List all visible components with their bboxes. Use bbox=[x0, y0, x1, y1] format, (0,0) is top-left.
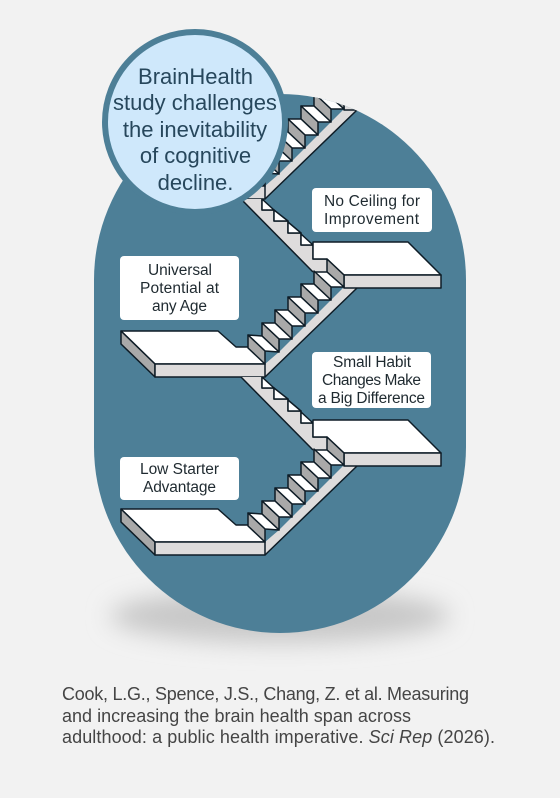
headline text: the inevitability bbox=[123, 117, 267, 142]
citation text bbox=[62, 684, 495, 747]
callout: Universal Potential at any Age: any Age bbox=[152, 298, 207, 315]
callout: Universal Potential at any Age bbox=[120, 256, 239, 320]
middle staircase flight bbox=[121, 199, 441, 377]
top staircase flight bbox=[247, 97, 358, 200]
callout: No Ceiling for Improvement bbox=[312, 188, 432, 232]
headline text: of cognitive bbox=[140, 143, 251, 168]
headline text: BrainHealth bbox=[138, 64, 253, 89]
headline text: decline. bbox=[158, 170, 233, 195]
callout: Small Habit Changes Make a Big Difference: a Big Difference bbox=[318, 390, 425, 407]
callout: Small Habit Changes Make a Big Difference: Changes Make bbox=[322, 372, 421, 389]
callout: Small Habit Changes Make a Big Difference: Small Habit bbox=[333, 354, 412, 371]
ground shadow bbox=[110, 589, 450, 643]
headline text: study challenges bbox=[113, 90, 277, 115]
callout: Small Habit Changes Make a Big Difference bbox=[312, 352, 431, 408]
callout: Universal Potential at any Age: Universal bbox=[148, 262, 212, 279]
headline circle bbox=[105, 32, 285, 212]
citation text: and increasing the brain health span across bbox=[62, 706, 411, 726]
callout: Universal Potential at any Age: Potential at bbox=[140, 280, 220, 297]
citation text: Cook, L.G., Spence, J.S., Chang, Z. et al. Measuring bbox=[62, 684, 469, 704]
callout: Low Starter Advantage bbox=[120, 457, 239, 500]
citation text: adulthood: a public health imperative. Sci Rep (2026). bbox=[62, 727, 495, 747]
bottom staircase flight bbox=[121, 377, 441, 555]
callout: No Ceiling for Improvement: No Ceiling for bbox=[324, 193, 420, 210]
callout: No Ceiling for Improvement: Improvement bbox=[324, 211, 420, 228]
staircase illustration bbox=[120, 97, 442, 556]
panel: teal rounded background bbox=[94, 94, 466, 633]
headline text bbox=[113, 64, 277, 195]
callout: Low Starter Advantage: Low Starter bbox=[140, 461, 219, 478]
callout: Low Starter Advantage: Advantage bbox=[143, 479, 216, 496]
